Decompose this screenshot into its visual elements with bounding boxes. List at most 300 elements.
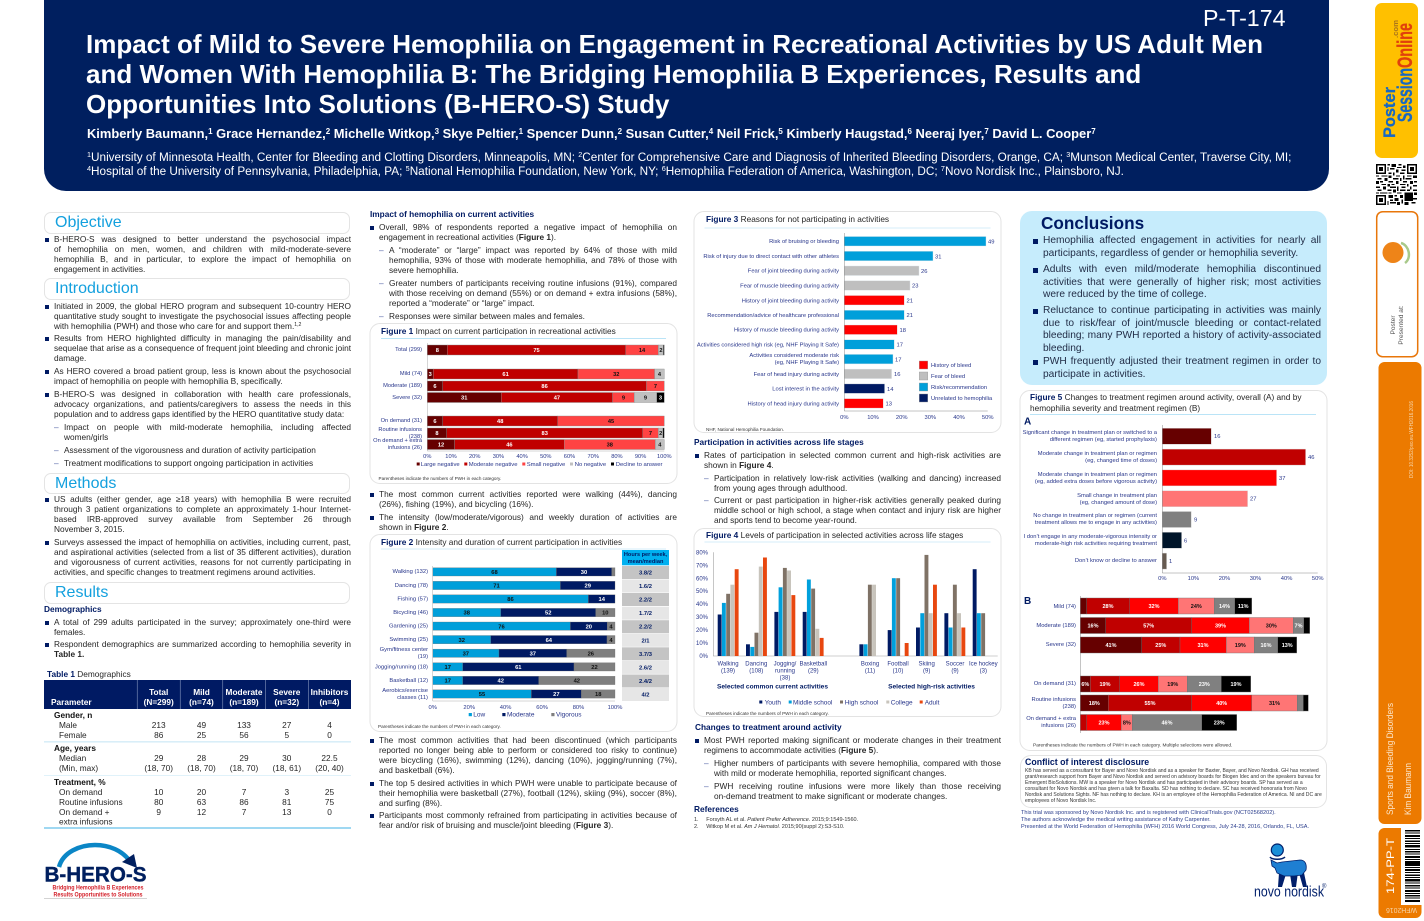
table rows: treatment: 80 [154, 797, 164, 807]
table rows: age: (18, 70) [187, 763, 216, 773]
figure 4 activity labels: Walking [717, 662, 739, 668]
figure 5 title: Figure 5 Changes to treatment regimen around activity, overall (A) and by [1030, 392, 1302, 402]
figure 2 bar values: 22 [591, 665, 598, 671]
figure 3 values: 31 [935, 254, 941, 260]
figure 1 bar values: 14 [639, 348, 646, 354]
figure 4 title: Figure 4 Levels of participation in selected activities across life stages [706, 530, 963, 540]
figure 5A labels: moderate-high risk activities requiring treatment [1035, 541, 1157, 547]
figure 4 activity labels: Skiing [919, 662, 935, 668]
logo tagline [52, 886, 144, 898]
figure 4 activity labels: (139) [721, 668, 735, 674]
figure 3 values: 17 [896, 343, 903, 349]
figure 5B bar values: 19% [1167, 682, 1178, 688]
objective text: hemophilia B, and in particular, to explore the impact of hemophilia on [54, 254, 351, 264]
figure 2 category labels: Walking (132) [392, 569, 428, 575]
table rows: treatment: 86 [239, 797, 249, 807]
figure 5A values: 1 [1169, 559, 1172, 565]
figure 5B labels: On demand (31) [1034, 681, 1076, 687]
objective text: B-HERO-S was designed to better understand the psychosocial impact [54, 234, 351, 244]
table rows: treatment: 63 [197, 797, 206, 807]
word: Session: Session [1394, 68, 1417, 122]
figure 5B bar values: 46% [1161, 720, 1173, 726]
heading: Methods: Methods [55, 475, 116, 492]
figure 1 category labels: Routine infusions [378, 427, 422, 433]
figure 5 title [1030, 392, 1316, 415]
table rows: age: Age, years [54, 743, 96, 753]
word: .com: .com [1393, 20, 1400, 38]
figure 2 axis: 0% [429, 705, 437, 711]
figure 2 bar values: 64 [546, 638, 553, 644]
table header row [44, 680, 351, 709]
affiliations: 1University of Minnesota Health, Center for Bleeding and Clotting Disorders, Minneapolis, MN; 2Center for Comprehensive Care and Diagnosis of Inherited Bleeding Disorders, Orange, CA; 3Munson Medical Center, Traverse City, MI; [87, 150, 1291, 164]
heading: Methods [44, 473, 350, 494]
table header row: (n=32) [274, 697, 299, 707]
word: Online: Online [1394, 23, 1417, 68]
conflict text: Emergent BioSolutions. MW is a speaker for Novo Nordisk and has participated in their advisory boards. SP has served as a [1025, 780, 1303, 786]
figure 5B bar values: 19% [1230, 682, 1242, 688]
figure 2 category labels: Swimming (25) [389, 637, 428, 643]
figure 4 y axis: 60% [696, 576, 709, 582]
figure 5B bar values: 31% [1197, 643, 1209, 649]
intro bullet 3: As HERO covered a broad patient group, less is known about the psychosocial impact of hemophilia on people with hemophilia B, specifically. [54, 366, 351, 386]
figure 1 axis: 30% [493, 454, 504, 460]
figure 3 values: 13 [886, 402, 892, 408]
figure 5B labels: Moderate (189) [1036, 623, 1076, 629]
table rows: age: (18, 70) [144, 763, 173, 773]
figure 1 axis: 20% [469, 454, 480, 460]
figure 1 axis: 10% [445, 454, 457, 460]
column 3 bullet 2: Most PWH reported making significant or moderate changes in their treatment regimens to accommodate activities (Figure 5). [704, 735, 1001, 755]
figure 1 bar values: 2 [659, 431, 662, 437]
figure 2 bar values: 27 [553, 692, 560, 698]
references list: 1. Forsyth AL et al. Patient Prefer Adherence. 2015;9:1549-1560. [694, 817, 858, 823]
figure 2 legend: Low [473, 712, 486, 718]
figure 2 bar values: 14 [598, 597, 606, 603]
figure 3 labels: Activities considered moderate risk [749, 353, 839, 359]
poster number: P-T-174 [1203, 5, 1285, 31]
figure 1 category labels [373, 347, 423, 451]
figure 5B labels: Routine infusions [1032, 697, 1076, 703]
title: Impact of Mild to Severe Hemophilia on Engagement in Recreational Activities by US Adult Men [86, 29, 1263, 59]
text: Presented at: Presented at: [1398, 305, 1405, 345]
table header row: Total [149, 687, 168, 697]
conclusion 3: bleeding; many PWH reported a history of activity-associated [1043, 330, 1321, 341]
subheading: participation across life stages: Participation in activities across life stages [694, 437, 864, 447]
conclusion 3: due to risk/fear of joint/muscle bleeding or contact-related [1043, 318, 1321, 329]
table rows: treatment: Treatment, % [54, 777, 106, 787]
figure 1 bar values: 2 [659, 348, 662, 354]
figure 3 legend: History of bleed [931, 363, 971, 369]
conclusions heading: Conclusions [1041, 213, 1144, 233]
sponsor and acknowledgement notes: Presented at the World Federation of Hemophilia (WFH) 2016 World Congress, July 24-28, 2016, Orlando, FL, USA. [1021, 824, 1309, 830]
figure 1 bar values: 4 [658, 372, 662, 378]
figure 3 legend: Risk/recommendation [931, 385, 987, 391]
figure 4 activity labels: Ice hockey [969, 662, 998, 668]
intro bullet 2: Results from HERO highlighted difficulty in managing the pain/disability and sequelae that arise as a consequence of frequent joint bleeding and chronic joint damage. [54, 333, 351, 363]
figure 1 bar values: 45 [608, 419, 614, 425]
objective text: of hemophilia on men, women, and children with mild-moderate-severe [54, 244, 351, 254]
figure 3 axis: 20% [896, 415, 908, 421]
column 3 sub-bullet 4 [714, 781, 1001, 801]
figure 3 labels: Fear of muscle bleeding during activity [740, 284, 839, 290]
figure 2 stacked bars [433, 568, 615, 698]
figure 5B bar values [1081, 604, 1303, 726]
figure 5A labels: different regimen (eg, started prophylaxis) [1050, 437, 1157, 443]
panel: conflict of interest [1020, 755, 1327, 808]
figure 5B bar values: 31% [1269, 701, 1280, 707]
figure 1 axis [423, 343, 672, 460]
figure 1 bar values: 7 [654, 384, 657, 390]
table title: Table 1 Demographics [47, 669, 131, 679]
table rows: gender: 25 [197, 730, 206, 740]
heading: Results: Results [55, 584, 108, 601]
figure 5B bar values: 16% [1087, 624, 1099, 630]
figure 2 legend: Moderate [507, 712, 535, 718]
figure 4 activity labels: (11) [865, 668, 875, 674]
figure 1 bar values: 32 [613, 372, 619, 378]
sponsor and acknowledgement notes [1021, 810, 1309, 830]
figure 5B bar values: 6% [1081, 682, 1089, 688]
conclusion 4: PWH frequently adjusted their treatment regimen in order to [1043, 356, 1321, 367]
figure 5B bar values: 18% [1089, 701, 1100, 707]
figure 3 legend: Unrelated to hemophilia [931, 396, 993, 402]
figure 1 bar values: 75 [533, 348, 540, 354]
figure 1 bar values: 38 [607, 442, 613, 448]
subheading: impact of hemophilia: Impact of hemophilia on current activities [370, 209, 534, 219]
column 2 sub-bullet 2: Greater numbers of participants receiving routine infusions (91%), compared with those receiving on demand (55%) or on demand + extra infusions (58%), reported a “moderate” or “large” impact. [389, 278, 677, 308]
figure 4 group headings: Selected high-risk activities [888, 684, 975, 690]
figure 1 category labels: Severe (32) [392, 395, 422, 401]
subheading: references: References [694, 804, 739, 814]
figure 2 hours per week column: 4/2 [641, 692, 650, 698]
figure 4 y axis: 80% [696, 550, 709, 556]
figure 2 bar values: 4 [609, 624, 613, 630]
table rows: gender: 86 [154, 730, 164, 740]
figure 5B bar values: 55% [1144, 701, 1156, 707]
figure 2 hours per week column: 3.7/3 [639, 652, 653, 658]
table rows: gender: Gender, n [54, 710, 92, 720]
figure 2 bar values: 32 [458, 638, 465, 644]
figure 5B axis [1079, 596, 1081, 733]
table rows: treatment: 75 [325, 797, 334, 807]
table 1: demographics [44, 669, 351, 828]
affiliations: 4Hospital of the University of Pennsylvania, Philadelphia, PA; 5National Hemophilia Foundation, New York, NY; 6Hemophilia Federation of America, Washington, DC; 7Novo Nordisk Inc., Plainsboro, NJ. [87, 164, 1124, 178]
sidebar: poster code and barcode [1378, 828, 1422, 918]
icon: WFH congress logo [1382, 242, 1409, 263]
table rows: gender: 4 [327, 720, 332, 730]
table rows: gender: 213 [152, 720, 166, 730]
figure 2 category labels [375, 569, 428, 701]
figure 2 bar values: 61 [515, 665, 522, 671]
table rows: treatment [44, 777, 351, 828]
figure 2 category labels: classes (11) [397, 695, 428, 701]
panel A label: A [1024, 416, 1031, 428]
figure 2 bar values: 20 [586, 624, 592, 630]
figure 2 bar values: 86 [507, 597, 514, 603]
figure 1 bar values: 9 [644, 396, 647, 402]
column 3 bullet 1: Rates of participation in selected common current and high-risk activities are shown in Figure 4. [704, 450, 1001, 470]
figure 4 y axis: 40% [696, 602, 709, 608]
intro bullet 4: B-HERO-S was designed in collaboration with health care professionals, advocacy organizations, and patients/caregivers to assess the needs in this population and to address gaps identified by the HERO quantitative study data: [54, 389, 351, 419]
figure 3 values: 17 [895, 357, 901, 363]
figure 4 activity labels: (9) [951, 668, 959, 674]
figure 2 hours per week column: 2.2/2 [639, 625, 652, 631]
figure 2 bar values: 71 [493, 584, 500, 590]
figure 5B bar values: 11% [1238, 604, 1249, 610]
figure 4 activity labels: Dancing [745, 662, 767, 668]
table rows: gender [44, 710, 351, 743]
figure 2 axis: 20% [463, 705, 475, 711]
table rows: treatment: Routine infusions [59, 797, 123, 807]
logo wordmark: B-HERO-S [44, 864, 146, 886]
figure 5 footnote: Parentheses indicate the numbers of PWH in each category. Multiple selections were allowed. [1033, 742, 1232, 748]
figure 5A axis: 40% [1281, 576, 1292, 582]
conflict heading: Conflict of interest disclosure [1025, 757, 1149, 767]
figure 3 values: 16 [894, 372, 900, 378]
heading: Objective [44, 212, 350, 234]
figure 1 category labels: Moderate (189) [383, 383, 422, 389]
figure 5B labels: Severe (32) [1046, 642, 1076, 648]
table header row: (N=299) [144, 697, 174, 707]
figure 2 hours per week column [622, 550, 669, 701]
figure 2 bar values: 55 [479, 692, 486, 698]
figure 2 axis: 60% [536, 705, 548, 711]
figure 1 bar values: 86 [541, 384, 548, 390]
figure 1 axis: 0% [423, 454, 431, 460]
conclusion 3: bleeding. [1043, 343, 1084, 354]
figure 1 bar values: 3 [429, 372, 432, 378]
figure 5B bar values: 30% [1266, 624, 1277, 630]
figure 2 bar values: 38 [463, 611, 471, 617]
figure 3 legend: Fear of bleed [931, 374, 965, 380]
figure 2 hours per week column: mean/median [628, 559, 664, 565]
table rows: age: 29 [239, 753, 249, 763]
figure 3 axis: 30% [924, 415, 936, 421]
barcode [1401, 828, 1424, 905]
figure 5A labels [1023, 430, 1158, 564]
figure 5 title: hemophilia severity and treatment regimen (B) [1030, 403, 1200, 413]
figure 4 legend: Youth [765, 699, 781, 706]
registered mark: ® [1322, 883, 1327, 890]
figure 2 hours per week column: 2/1 [641, 638, 650, 644]
table header row: (n=4) [319, 697, 340, 707]
figure 5A axis: 50% [1312, 576, 1324, 582]
methods bullet 1: through 3 patient organizations to complete an approximately 1-hour Internet- [54, 504, 351, 514]
logo: B-HERO-S [44, 842, 147, 899]
figure 1 bar values [429, 348, 662, 448]
figure 1 footnote: Parentheses indicate the numbers of PWH in each category. [378, 476, 501, 481]
figure 3 labels: Recommendation/advice of healthcare professional [707, 313, 839, 319]
figure 2 axis: 80% [573, 705, 584, 711]
figure 2 category labels: Bicycling (46) [393, 610, 428, 616]
figure 2 bar values: 30 [581, 570, 587, 576]
figure 1 axis: 80% [611, 454, 623, 460]
figure 3 labels: History of head injury during activity [747, 402, 839, 408]
column 2 bullet 2: The most common current activities reported were walking (44%), dancing (26%), fishing (19%), and bicycling (16%). [379, 489, 677, 509]
figure 2 bar values: 29 [584, 584, 592, 590]
figure 5A axis: 0% [1158, 576, 1166, 582]
conflict text: grant/research support from Bayer and Novo Nordisk and served on advisory boards for Biogen Idec and on the speakers bureau for [1025, 774, 1321, 780]
figure 1 axis: 90% [635, 454, 646, 460]
figure 4 y axis: 0% [699, 654, 709, 660]
methods bullet 1: US adults (either gender, age ≥18 years) with hemophilia B were recruited [54, 494, 351, 504]
sidebar: orange category bar [1378, 362, 1422, 824]
figure 3 labels: Fear of joint bleeding during activity [748, 268, 839, 274]
figure 5B labels: infusions (26) [1041, 723, 1076, 729]
figure 4 activity labels [717, 662, 998, 682]
table rows: treatment: 9 [156, 807, 161, 817]
figure 5A values: 16 [1214, 434, 1220, 440]
intro sub-bullet 3: Treatment modifications to support ongoing participation in activities [64, 458, 313, 468]
table rows: treatment: 10 [154, 787, 164, 797]
figure 5: treatment regimen changes [1020, 390, 1328, 751]
figure 5A labels: Moderate change in treatment plan or regimen [1038, 472, 1157, 478]
figure 1 bar values: 46 [506, 442, 513, 448]
figure 4 grouped bars [718, 555, 985, 656]
figure 3 values: 49 [988, 240, 994, 246]
figure 4 group headings [717, 684, 975, 690]
table rows: treatment: On demand [59, 787, 103, 797]
figure 1 bar values: 3 [659, 396, 662, 402]
figure 4 group headings: Selected common current activities [717, 684, 828, 690]
methods bullet 1 [54, 494, 351, 534]
table rows: age: (Min, max) [59, 763, 98, 773]
figure 1 category labels: (238) [409, 434, 422, 440]
figure 5A values: 9 [1194, 518, 1197, 524]
column 3 sub-bullet 4: PWH receiving routine infusions were more likely than those receiving [714, 781, 1001, 791]
table rows: age: 29 [154, 753, 164, 763]
figure 2 bar values: 42 [497, 679, 504, 685]
figure 4 activity labels: (108) [749, 668, 763, 674]
figure 4 activity labels: (3) [980, 668, 987, 674]
conflict text: employees of Novo Nordisk Inc. [1025, 798, 1096, 804]
figure 4 legend: Adult [925, 699, 940, 706]
figure 3 axis: 50% [982, 415, 994, 421]
logo arc arrow [59, 845, 137, 868]
table rows: gender: Male [59, 720, 77, 730]
conclusion 1: participants, regardless of gender or hemophilia severity. [1043, 248, 1298, 259]
figure 1 bar values: 4 [658, 442, 662, 448]
methods bullet 1: November 3, 2015. [54, 524, 125, 534]
table rows: age: 22.5 [321, 753, 338, 763]
title: Opportunities Into Solutions (B-HERO-S) Study [86, 89, 670, 119]
conflict text: Nordisk and Solutions Sights. NF has nothing to declare. KH is an employee of the Hemophilia Federation of America. NI and DC are [1025, 792, 1322, 798]
figure 3: reasons bars [694, 211, 1002, 433]
title: and Women With Hemophilia B: The Bridging Hemophilia B Experiences, Results and [86, 59, 1141, 89]
upside-down WFH2016 label: WFH2016 [1386, 906, 1417, 913]
conclusion 2: activities that were generally of higher risk; most activities [1043, 277, 1321, 288]
figure 4 activity labels: Football [887, 662, 909, 668]
text: Poster: Poster [1390, 315, 1397, 335]
figure 5A labels: (eg, changed time of doses) [1085, 458, 1157, 464]
methods bullet 1: based IRB-approved survey available from September 26 through [54, 514, 351, 524]
table rows: gender: 5 [284, 730, 289, 740]
figure 1 stacked bars [427, 345, 664, 450]
figure 4 legend: Middle school [793, 699, 832, 706]
figure 1 axis: 40% [516, 454, 528, 460]
conclusion 4 [1043, 356, 1321, 381]
panel B label: B [1024, 596, 1031, 607]
figure 3 values: 21 [906, 298, 913, 304]
figure 4 y axis: 10% [696, 641, 709, 647]
logo: Novo Nordisk [1254, 843, 1327, 900]
figure 5B bar values: 23% [1214, 720, 1225, 726]
figure 5A labels: (eg, added extra doses before vigorous activity) [1035, 479, 1157, 485]
figure 2 bar values: 37 [530, 651, 536, 657]
figure 4 activity labels: (29) [808, 668, 819, 674]
figure 2 bar values: 18 [595, 692, 602, 698]
figure 5B stacked bars [1080, 598, 1310, 730]
sidebar: presented-at card [1376, 211, 1418, 358]
figure 3 labels [697, 239, 839, 408]
figure 3 labels: History of muscle bleeding during activity [734, 328, 839, 334]
table rows: treatment: 0 [327, 807, 332, 817]
figure 5B bar values: 57% [1143, 624, 1154, 630]
figure 2 bar values: 17 [444, 665, 451, 671]
intro sub-bullet 1: Impact on people with mild-moderate hemophilia, including affected women/girls [64, 422, 351, 442]
table rows: treatment: 25 [325, 787, 334, 797]
objective text: engagement in activities. [54, 264, 145, 274]
figure 2 bar values: 42 [574, 679, 580, 685]
table header row: Inhibitors [311, 687, 349, 697]
figure 5A labels: No change in treatment plan or regimen (current [1033, 513, 1157, 519]
sidebar: QR code [1376, 164, 1417, 205]
table header row: (n=189) [229, 697, 259, 707]
table rows: gender: 27 [282, 720, 292, 730]
figure 4 footnote: Parentheses indicate the numbers of PWH in each category. [706, 711, 829, 716]
figure 3 labels: Risk of bruising or bleeding [769, 239, 839, 245]
table header row: Severe [273, 687, 301, 697]
figure 1 bar values: 6 [433, 384, 437, 390]
table rows: treatment: 20 [197, 787, 206, 797]
column 2 bullet 5: The top 5 desired activities in which PWH were unable to participate because of their hemophilia were basketball (27%), football (12%), skiing (9%), soccer (8%), and surfing (8%). [379, 778, 677, 808]
figure 4 activity labels: running [775, 668, 795, 674]
figure 1 category labels: Total (299) [395, 347, 422, 353]
figure 2 hours per week column: Hours per week, [624, 552, 668, 558]
table rows: treatment: On demand + [59, 807, 110, 817]
figure 5A labels: (eg, changed amount of dose) [1080, 500, 1157, 506]
figure 5B bar values: 23% [1199, 682, 1210, 688]
figure 1 legend: Large negative [421, 462, 460, 468]
table header row: Mild [193, 687, 210, 697]
table rows: gender: Female [59, 730, 87, 740]
sidebar: PosterSessionOnline logo [1375, 3, 1418, 158]
sponsor and acknowledgement notes: The authors acknowledge the medical writing assistance of Kathy Carpenter. [1021, 817, 1211, 823]
figure 5B bar values: 40% [1216, 701, 1227, 707]
figure 1 title: Figure 1 Impact on current participation in recreational activities [381, 326, 616, 336]
figure 5A values: 37 [1279, 476, 1285, 482]
heading: Introduction [44, 278, 350, 300]
figure 1 bar values: 8 [435, 431, 439, 437]
figure 3 legend [919, 361, 993, 402]
figure 2 axis: 100% [608, 705, 622, 711]
figure 1 bar values: 83 [542, 431, 548, 437]
figure 3 axis [840, 233, 994, 421]
figure 5B bar values: 14% [1219, 604, 1230, 610]
column 2 bullet 1: Overall, 98% of respondents reported a negative impact of hemophilia on engagement in recreational activities (Figure 1). [379, 222, 677, 242]
figure 2 category labels: Aerobics/exercise [382, 688, 428, 694]
panel: conclusions [1020, 211, 1327, 385]
figure 3 footnote: NHF, National Hemophilia Foundation. [706, 427, 784, 432]
table header row: Parameter [51, 697, 92, 707]
table rows: gender: 49 [197, 720, 206, 730]
figure 1 bar values: 7 [649, 431, 652, 437]
figure 1: impact bars [370, 323, 678, 484]
column 2 sub-bullet 1: A “moderate” or “large” impact was reported by 64% of those with mild hemophilia, 93% of those with moderate hemophilia, and 78% of those with severe hemophilia. [389, 245, 677, 275]
column 3 sub-bullet 4: on-demand treatment to make significant or moderate changes. [714, 791, 947, 801]
figure 1 bar values: 8 [436, 348, 439, 354]
column 2 bullet 6: Participants most commonly refrained from participating in activities because of fear and/or risk of bruising and muscle/joint bleeding (Figure 3). [379, 810, 677, 830]
